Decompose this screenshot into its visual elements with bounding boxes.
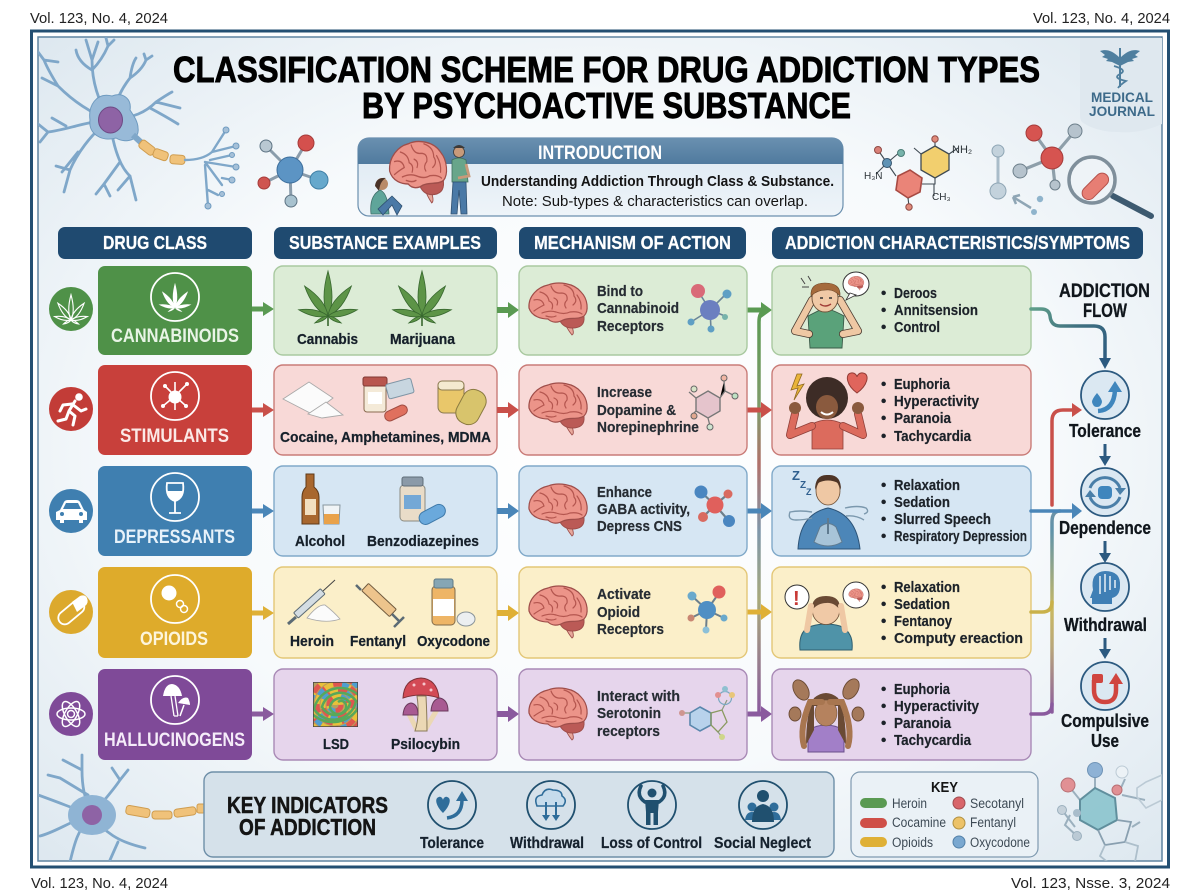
class card: depressants: DEPRESSANTS <box>114 526 235 548</box>
icon: psilocybin mushrooms <box>403 678 448 731</box>
mechanism panel: cannabinoids <box>519 266 747 355</box>
column header: mechanism of action: MECHANISM OF ACTION <box>534 233 731 253</box>
icon: LSD spiral blotter <box>313 682 358 727</box>
symptoms panel: hallucinogens: Paranoia <box>894 715 952 732</box>
person: holding head <box>795 272 869 348</box>
icon: serotonin molecule <box>679 686 735 740</box>
symptoms panel: hallucinogens <box>772 669 1031 760</box>
indicator: loss of control: Loss of Control <box>601 835 702 852</box>
addiction flow heading: ADDICTION <box>1059 281 1150 302</box>
symptoms panel: hallucinogens: • <box>881 681 886 698</box>
intro text: Understanding Addiction Through Class & Substance. <box>481 173 834 190</box>
panel: key legend: Secotanyl <box>970 796 1024 811</box>
symptoms panel: cannabinoids: • <box>881 319 886 336</box>
molecule: chemical structure <box>864 136 972 210</box>
arrow <box>497 706 519 722</box>
molecule and magnifying glass <box>990 124 1151 216</box>
symptoms panel: cannabinoids <box>772 266 1031 355</box>
symptoms panel: cannabinoids: Deroos <box>894 285 937 302</box>
indicator: social neglect: Social Neglect <box>714 835 811 852</box>
panel: key legend: Fentanyl <box>970 815 1016 830</box>
mechanism panel: stimulants: Increase <box>597 384 652 401</box>
footer: volume left: Vol. 123, No. 4, 2024 <box>31 876 168 892</box>
symptoms panel: hallucinogens: • <box>881 715 886 732</box>
class card: cannabinoids <box>98 266 252 355</box>
symptoms panel: hallucinogens: Tachycardia <box>894 732 972 749</box>
mechanism panel: hallucinogens: Interact with <box>597 688 680 705</box>
arrow <box>252 707 274 721</box>
icon: jar and capsule <box>400 477 448 527</box>
symptoms panel: opioids <box>772 567 1031 658</box>
icon: hallucinogen side badge <box>49 692 93 736</box>
row: hallucinogens <box>49 669 1031 760</box>
symptoms panel: depressants: Slurred Speech <box>894 511 991 528</box>
footer: volume right: Vol. 123, Nsse. 3, 2024 <box>1011 876 1170 892</box>
symptoms panel: cannabinoids: Annitsension <box>894 302 978 319</box>
icon: stimulant side badge <box>49 387 93 431</box>
molecule: chemical structure: CH₃ <box>932 192 951 203</box>
symptoms panel: opioids: Computy ereaction <box>894 630 1023 647</box>
icon: marijuana leaf <box>392 271 452 326</box>
person: raised fists <box>789 373 867 449</box>
arrow <box>252 403 274 417</box>
icon: receptor molecule <box>688 284 732 332</box>
class card: opioids <box>98 567 252 658</box>
title: BY PSYCHOACTIVE SUBSTANCE <box>362 85 851 126</box>
person: breathing: Z <box>800 480 806 491</box>
icon: syringe and powder <box>288 580 340 624</box>
symptoms panel: stimulants: • <box>881 376 886 393</box>
arrow <box>1099 638 1111 659</box>
flow step: compulsive use: Use <box>1091 731 1119 751</box>
icon: fentanyl syringe <box>356 583 404 627</box>
column header: substance examples <box>274 227 497 259</box>
symptoms panel: stimulants: Euphoria <box>894 376 951 393</box>
icon: GABA molecule <box>694 486 735 527</box>
arrow <box>497 302 519 318</box>
substance panel: cannabinoids: Cannabis <box>297 331 358 348</box>
icon: depressant side badge <box>49 489 93 533</box>
symptoms panel: cannabinoids: • <box>881 302 886 319</box>
neuron illustration: top left <box>38 38 239 209</box>
indicator: withdrawal <box>510 781 584 852</box>
panel: key legend: Cocamine <box>892 815 946 830</box>
substance panel: cannabinoids: Marijuana <box>390 331 456 348</box>
panel: key legend <box>851 772 1038 857</box>
symptoms panel: stimulants: Hyperactivity <box>894 393 980 410</box>
symptoms panel: opioids: Relaxation <box>894 579 960 596</box>
class card: depressants <box>98 466 252 556</box>
mechanism panel: cannabinoids: Cannabinoid <box>597 300 679 317</box>
arrow <box>252 606 274 620</box>
panel: key legend: Heroin <box>892 796 927 811</box>
mechanism panel: cannabinoids: Bind to <box>597 283 643 300</box>
arrow <box>1099 541 1111 563</box>
myelin sheath <box>125 804 205 819</box>
icon: beer bottle and glass <box>302 474 340 524</box>
symptoms panel: stimulants: • <box>881 428 886 445</box>
class card: stimulants <box>98 365 252 455</box>
myelin sheath <box>138 139 185 165</box>
flow step: withdrawal: Withdrawal <box>1064 615 1147 635</box>
mechanism panel: hallucinogens: Serotonin <box>597 705 661 722</box>
flow step: compulsive use: Compulsive <box>1061 711 1149 731</box>
symptoms panel: opioids: Fentanoy <box>894 613 953 630</box>
medical journal badge: MEDICAL <box>1091 89 1153 105</box>
column header: addiction characteristics: ADDICTION CHARACTERISTICS/SYMPTOMS <box>785 233 1130 253</box>
symptoms panel: opioids: • <box>881 596 886 613</box>
substance panel: opioids: Oxycodone <box>417 633 490 650</box>
symptoms panel: depressants: • <box>881 494 886 511</box>
column header: addiction characteristics <box>772 227 1143 259</box>
panel: key legend: Oxycodone <box>970 835 1030 850</box>
icon: oxycodone jar <box>432 579 475 626</box>
symptoms panel: hallucinogens: Hyperactivity <box>894 698 980 715</box>
mechanism panel: opioids: Activate <box>597 586 651 603</box>
symptoms panel: cannabinoids: • <box>881 285 886 302</box>
molecule: chemical structure: H₃N <box>864 171 883 182</box>
flow step: compulsive use <box>1061 662 1149 751</box>
mechanism panel: hallucinogens: receptors <box>597 723 660 740</box>
header: volume left: Vol. 123, No. 4, 2024 <box>30 11 168 27</box>
indicator: tolerance: Tolerance <box>420 835 484 852</box>
molecule: top left ball and stick <box>258 135 328 207</box>
person: overwhelmed: ! <box>793 588 800 610</box>
panel: introduction: Note: Sub-types & characteristics can overlap. <box>502 193 808 210</box>
mechanism panel: hallucinogens <box>519 669 747 760</box>
intro illustration: brain and two people <box>371 142 469 215</box>
class card: hallucinogens <box>98 669 252 760</box>
person: breathing: Z <box>806 487 812 497</box>
mechanism panel: stimulants <box>519 365 747 455</box>
arrow <box>252 504 274 518</box>
arrow <box>497 503 519 519</box>
symptoms panel: depressants: • <box>881 528 886 545</box>
symptoms panel: hallucinogens: • <box>881 732 886 749</box>
column header: substance examples: SUBSTANCE EXAMPLES <box>289 233 481 253</box>
icon: capsule jar <box>438 381 490 429</box>
symptoms panel: stimulants: Tachycardia <box>894 428 972 445</box>
row: depressants <box>49 466 1031 556</box>
symptoms panel: depressants <box>772 466 1031 556</box>
symptoms panel: cannabinoids: Control <box>894 319 940 336</box>
symptoms panel: hallucinogens: • <box>881 698 886 715</box>
axon <box>131 133 143 144</box>
arrow <box>497 402 519 418</box>
substance panel: opioids: Fentanyl <box>350 633 406 650</box>
symptoms panel: stimulants: • <box>881 393 886 410</box>
person: overwhelmed <box>785 582 869 650</box>
panel: key indicators of addiction: KEY INDICATORS <box>227 792 388 818</box>
header: volume right: Vol. 123, No. 4, 2024 <box>1033 11 1170 27</box>
substance panel: hallucinogens <box>274 669 497 760</box>
panel: key legend: KEY <box>931 779 958 796</box>
icon: dopamine molecule <box>689 375 738 430</box>
icon: opioid receptor molecule <box>688 586 728 634</box>
symptoms panel: depressants: • <box>881 511 886 528</box>
mechanism panel: depressants <box>519 466 747 556</box>
indicator: loss of control <box>601 781 702 852</box>
arrow <box>252 302 274 316</box>
connector: mechanism to symptoms bus <box>747 302 772 722</box>
class card: stimulants: STIMULANTS <box>120 425 229 447</box>
symptoms panel: opioids: • <box>881 630 886 647</box>
symptoms panel: depressants: Sedation <box>894 494 950 511</box>
icon: opioid side badge <box>49 590 93 634</box>
connector: symptoms to addiction flow <box>1031 309 1111 714</box>
symptoms panel: depressants: • <box>881 477 886 494</box>
symptoms panel: stimulants: Paranoia <box>894 410 952 427</box>
panel: introduction <box>358 138 843 216</box>
flow step: dependence: Dependence <box>1059 518 1151 538</box>
nucleus <box>98 107 122 133</box>
addiction flow heading <box>1059 281 1150 322</box>
person: breathing <box>789 468 868 549</box>
title: CLASSIFICATION SCHEME FOR DRUG ADDICTION TYPES <box>173 49 1040 90</box>
symptoms panel: opioids: Sedation <box>894 596 950 613</box>
row: opioids <box>49 567 1031 658</box>
person: hands on head with floating leaves <box>789 676 864 752</box>
column header: drug class: DRUG CLASS <box>103 233 207 253</box>
indicator: social neglect <box>714 781 811 852</box>
flow step: tolerance <box>1069 371 1141 441</box>
substance panel: cannabinoids <box>274 266 497 355</box>
panel: key indicators of addiction <box>204 772 834 857</box>
substance panel: hallucinogens: LSD <box>323 736 349 753</box>
class card: cannabinoids: CANNABINOIDS <box>111 325 239 347</box>
class card: opioids: OPIOIDS <box>140 628 208 650</box>
substance panel: stimulants: Cocaine, Amphetamines, MDMA <box>280 429 491 446</box>
title <box>173 49 1040 126</box>
substance panel: hallucinogens: Psilocybin <box>391 736 460 753</box>
column header: drug class <box>58 227 252 259</box>
flow step: dependence <box>1059 468 1151 538</box>
mechanism panel: stimulants: Dopamine & <box>597 402 676 419</box>
symptoms panel: depressants: Relaxation <box>894 477 960 494</box>
arrow <box>1099 444 1111 466</box>
arrow <box>497 605 519 621</box>
heading: introduction: INTRODUCTION <box>538 143 662 164</box>
symptoms panel: opioids: • <box>881 613 886 630</box>
substance panel: opioids: Heroin <box>290 633 334 650</box>
mechanism panel: opioids <box>519 567 747 658</box>
person: breathing: Z <box>792 468 800 483</box>
mechanism panel: stimulants: Norepinephrine <box>597 419 699 436</box>
substance panel: stimulants <box>274 365 497 455</box>
mechanism panel: depressants: Enhance <box>597 484 652 501</box>
addiction flow heading: FLOW <box>1083 301 1127 322</box>
mechanism panel: opioids: Receptors <box>597 621 664 638</box>
column header: mechanism of action <box>519 227 746 259</box>
molecule: chemical structure: NH₂ <box>952 144 972 156</box>
icon: cannabis leaf <box>298 271 358 326</box>
substance panel: depressants: Benzodiazepines <box>367 533 479 550</box>
substance panel: depressants: Alcohol <box>295 533 345 550</box>
medical journal badge <box>1080 38 1162 132</box>
medical journal badge: JOURNAL <box>1089 103 1155 119</box>
symptoms panel: depressants: Respiratory Depression <box>894 528 1027 545</box>
mechanism panel: opioids: Opioid <box>597 604 640 621</box>
mechanism panel: depressants: Depress CNS <box>597 518 682 535</box>
substance panel: opioids <box>274 567 497 658</box>
panel: key indicators of addiction: OF ADDICTION <box>239 814 376 840</box>
icon: pill jar and blister <box>363 377 414 423</box>
symptoms panel: stimulants <box>772 365 1031 455</box>
panel: key legend: Opioids <box>892 835 933 850</box>
icon: cannabinoid side badge <box>49 287 93 331</box>
symptoms panel: opioids: • <box>881 579 886 596</box>
class card: hallucinogens: HALLUCINOGENS <box>104 729 245 751</box>
icon: powder piles <box>283 382 343 418</box>
molecule: bottom right <box>1058 762 1162 868</box>
symptoms panel: hallucinogens: Euphoria <box>894 681 951 698</box>
flow step: withdrawal <box>1064 563 1147 635</box>
indicator: withdrawal: Withdrawal <box>510 835 584 852</box>
row: stimulants <box>49 365 1031 455</box>
substance panel: depressants <box>274 466 497 556</box>
icon: caduceus <box>1100 48 1140 88</box>
mechanism panel: cannabinoids: Receptors <box>597 318 664 335</box>
indicator: tolerance <box>420 781 484 852</box>
row: cannabinoids <box>49 266 1031 355</box>
flow step: tolerance: Tolerance <box>1069 421 1141 441</box>
neuron illustration: bottom left <box>38 755 205 862</box>
mechanism panel: depressants: GABA activity, <box>597 501 690 518</box>
symptoms panel: stimulants: • <box>881 410 886 427</box>
